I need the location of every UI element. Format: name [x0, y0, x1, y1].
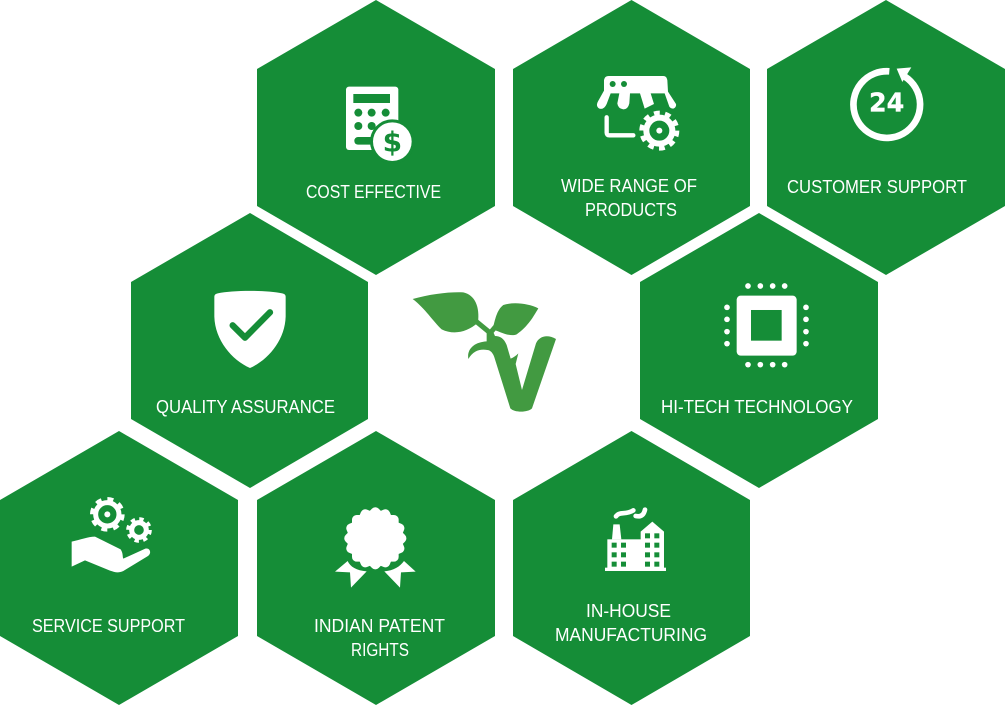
panel: customer support [767, 0, 1005, 275]
label: hi-tech technology: HI-TECH TECHNOLOGY [661, 397, 853, 417]
icon: 24 hour clock [853, 67, 920, 138]
label: in-house manufacturing: MANUFACTURING [555, 625, 707, 645]
label: indian patent rights [314, 616, 445, 660]
label: wide range of products: PRODUCTS [585, 200, 677, 220]
icon: 24 hour clock: 24 [869, 88, 904, 118]
icon: shield with check [214, 291, 286, 368]
panel: hi-tech technology [640, 213, 878, 488]
icon: factory [605, 510, 666, 571]
icon: calculator with dollar: $ [383, 125, 402, 158]
label: in-house manufacturing [555, 601, 707, 645]
label: wide range of products: WIDE RANGE OF [561, 176, 697, 196]
label: customer support: CUSTOMER SUPPORT [787, 177, 967, 197]
panel: cost effective [257, 0, 495, 275]
label: indian patent rights: RIGHTS [351, 640, 409, 660]
panel: service support [0, 431, 238, 705]
panel: indian patent rights [257, 431, 495, 705]
label: service support: SERVICE SUPPORT [32, 616, 185, 636]
icon: microchip [724, 283, 809, 367]
icon: store with gear [597, 76, 677, 148]
label: in-house manufacturing: IN-HOUSE [586, 601, 671, 621]
panel: in-house manufacturing [513, 431, 750, 705]
label: quality assurance: QUALITY ASSURANCE [156, 397, 335, 417]
icon: rosette badge [335, 505, 416, 588]
label: indian patent rights: INDIAN PATENT [314, 616, 445, 636]
logo: sprouting V [413, 292, 556, 412]
icon: calculator with dollar [346, 87, 415, 164]
label: wide range of products [561, 176, 697, 220]
panel: quality assurance [131, 213, 368, 488]
label: cost effective: COST EFFECTIVE [306, 182, 441, 202]
icon: hand with gears [72, 499, 150, 572]
panel: wide range of products [513, 0, 750, 275]
